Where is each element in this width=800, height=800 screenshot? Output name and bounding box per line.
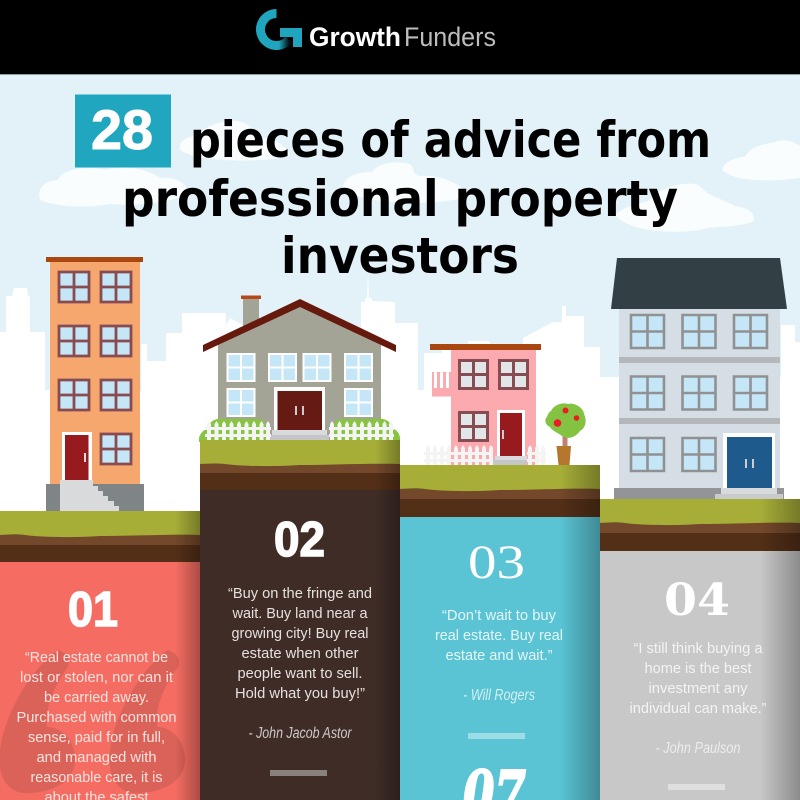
ground strip 3: [400, 465, 600, 517]
number 04: 04: [664, 575, 730, 626]
white picket fences: [205, 421, 394, 441]
clouds: [39, 121, 800, 232]
ground strip 2: [200, 440, 400, 490]
quote text 2: “Buy on the fringe and: [228, 585, 372, 602]
divider bar 4: [668, 784, 725, 790]
icon: potted apple tree: [545, 403, 586, 465]
quote text 3: real estate. Buy real: [435, 627, 563, 644]
quote text 2: [228, 585, 372, 702]
panel 3: ground and quote: [400, 465, 600, 800]
quote text 1: reasonable care, it is: [30, 769, 162, 786]
white fence: [424, 445, 546, 465]
quote text 1: be carried away.: [44, 689, 149, 706]
badge: 28: 28: [91, 98, 153, 161]
number 02: 02: [274, 513, 325, 567]
author 4: - John Paulson: [656, 740, 740, 757]
logo: GrowthFunders: [261, 14, 496, 52]
quote text 1: sense, paid for in full,: [28, 729, 165, 746]
panel 2: ground and quote: [200, 440, 400, 800]
house 3: pink house: [424, 344, 546, 465]
divider bar 2: [270, 770, 327, 776]
quote text 2: people want to sell.: [238, 665, 362, 682]
divider bar 3: [468, 733, 525, 739]
quote text 3: estate and wait.”: [446, 647, 553, 664]
panel 1: ground and quote: [0, 511, 200, 800]
logo wordmark: Funders: [404, 22, 496, 52]
number 01: 01: [68, 583, 118, 637]
logo wordmark: Growth: [309, 22, 401, 52]
ground strip 4: [600, 499, 800, 551]
badge: 28: [75, 94, 171, 168]
quote text 2: growing city! Buy real: [232, 625, 368, 642]
house 2: grey family house: [199, 296, 400, 442]
city skyline: [0, 275, 800, 515]
quote text 3: [435, 607, 563, 664]
balcony: [432, 371, 451, 396]
title line 3: investors: [281, 227, 519, 285]
quote text 2: estate when other: [242, 645, 359, 662]
quote text 1: Purchased with common: [16, 709, 176, 726]
quote text 2: Hold what you buy!”: [235, 685, 365, 702]
ground strip 1: [0, 511, 200, 562]
quote text 2: wait. Buy land near a: [232, 605, 368, 622]
author 3: - Will Rogers: [463, 687, 535, 704]
building 4: grey townhouse: [611, 258, 787, 499]
quote text 4: [630, 640, 767, 717]
title line 2: professional property: [122, 170, 678, 228]
header bar: [0, 0, 800, 74]
panel 4: ground and quote: [600, 499, 800, 800]
title: [75, 94, 711, 285]
quote text 1: and managed with: [36, 749, 156, 766]
quote text 4: “I still think buying a: [634, 640, 763, 657]
quote text 1: [16, 649, 176, 800]
icon: G mark: [261, 14, 302, 47]
author 2: - John Jacob Astor: [248, 725, 352, 742]
title line 1: pieces of advice from: [190, 111, 711, 169]
quote text 1: lost or stolen, nor can it: [20, 669, 174, 686]
quote text 4: investment any: [648, 680, 748, 697]
quote text 3: “Don’t wait to buy: [442, 607, 556, 624]
building 1: orange apartment: [46, 257, 144, 511]
big quotation mark: [0, 650, 185, 793]
quote text 4: home is the best: [644, 660, 752, 677]
quote text 1: “Real estate cannot be: [25, 649, 168, 666]
number 03: 03: [468, 536, 525, 589]
quote text 4: individual can make.”: [630, 700, 767, 717]
